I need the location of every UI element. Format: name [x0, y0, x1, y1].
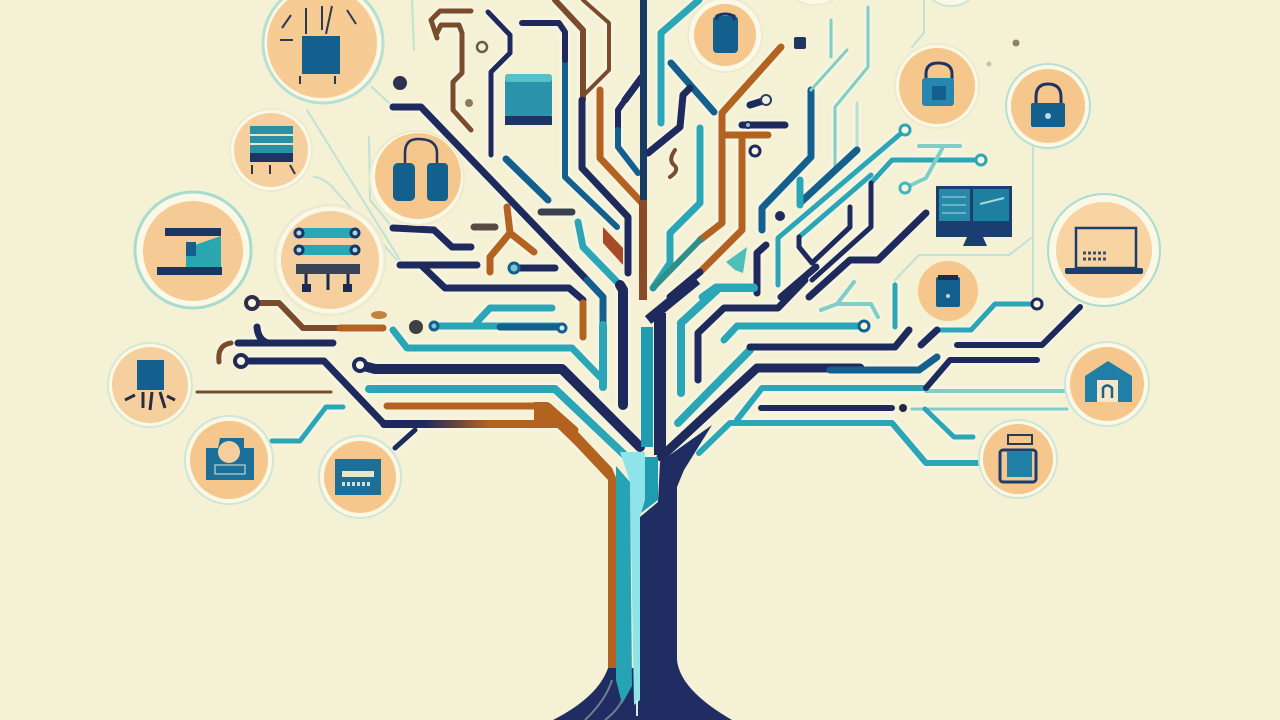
circle: keyboard chip: [230, 109, 312, 191]
circle: top partial center: [779, 0, 851, 5]
trunk teal strand: [616, 466, 632, 704]
ring and dot nodes: [235, 37, 1042, 412]
trunk light strand: [620, 452, 645, 705]
circle: padlock top: [688, 0, 762, 72]
upper right traces: [648, 0, 981, 297]
teal shard and red blob details: [603, 227, 747, 273]
circle: laptop right: [1048, 194, 1160, 306]
circle: scanner device: [979, 420, 1057, 498]
root streaks: [585, 680, 637, 720]
trunk orange strand: [534, 402, 617, 672]
circle: padlock right: [1006, 64, 1090, 148]
circle: chip top left: [263, 0, 383, 103]
trunk teal block: [641, 457, 658, 513]
upper left traces: [393, 0, 642, 405]
circle: arch gate: [1065, 342, 1149, 426]
thin connector lines: [307, 0, 1033, 325]
circle: tablet icon: [319, 436, 401, 518]
tree trunk: [534, 402, 732, 720]
circle: server racks: [275, 205, 385, 315]
circle: board with legs: [108, 343, 192, 427]
monitor icon: [936, 186, 1012, 246]
circle: memory card: [918, 261, 978, 321]
circle: top partial right: [921, 0, 981, 6]
circle: camera icon: [185, 416, 273, 504]
chip block: [505, 74, 552, 125]
middle left traces: [197, 303, 640, 470]
circle: laptop left: [135, 192, 251, 308]
lower right traces: [661, 280, 1080, 463]
center trunk lines: [639, 0, 697, 455]
left branches of circuit tree: [197, 0, 642, 470]
circle: padlock with chip: [895, 44, 979, 128]
circle: split padlock: [370, 131, 464, 225]
trunk navy body and roots: [553, 425, 732, 720]
right branches of circuit tree: [648, 0, 1080, 463]
